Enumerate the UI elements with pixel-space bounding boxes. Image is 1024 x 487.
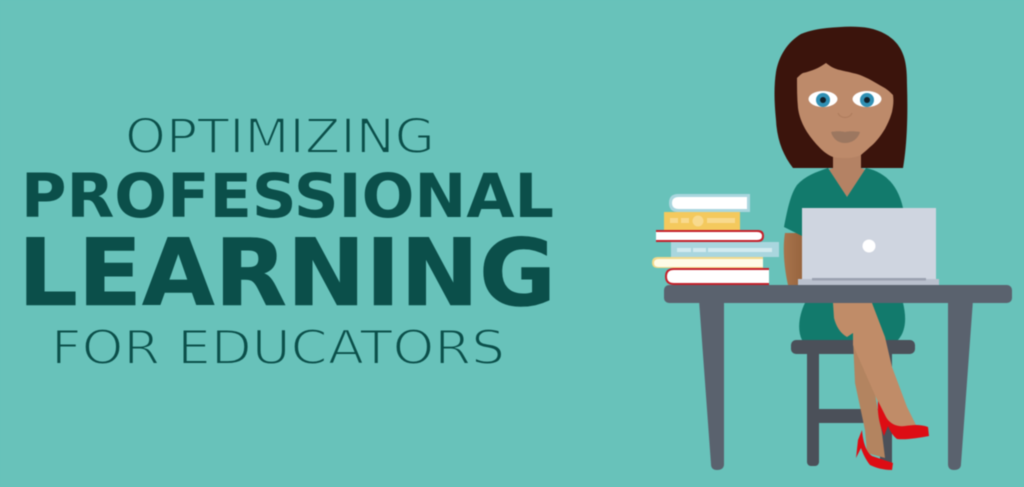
book: white with blue cover	[669, 194, 750, 212]
title line: PROFESSIONAL: PROFESSIONAL	[21, 161, 554, 232]
back leg	[853, 340, 885, 458]
illustration: table	[664, 285, 1012, 470]
nose	[838, 113, 852, 118]
book: red edged	[656, 230, 764, 242]
book: cream	[652, 257, 763, 268]
eyes	[808, 91, 882, 107]
skirt	[799, 303, 905, 340]
title line: LEARNING: LEARNING	[18, 219, 556, 327]
back shoe	[856, 430, 893, 470]
laptop screen	[802, 208, 936, 280]
title line: OPTIMIZING: OPTIMIZING	[125, 109, 435, 165]
arm	[784, 233, 803, 285]
neck	[828, 150, 866, 197]
laptop base	[798, 279, 939, 285]
illustration: woman	[774, 27, 929, 470]
illustration: stool	[791, 340, 915, 466]
book: yellow	[664, 212, 740, 230]
illustration: book stack	[652, 194, 779, 285]
title	[18, 109, 556, 376]
hair	[774, 27, 907, 168]
laptop logo	[862, 240, 876, 252]
front shoe	[878, 401, 929, 439]
illustration: laptop	[798, 208, 939, 285]
book: light blue	[671, 242, 779, 257]
front leg	[833, 303, 917, 428]
title line: FOR EDUCATORS: FOR EDUCATORS	[51, 321, 505, 376]
torso	[784, 168, 904, 285]
book: white with red cover	[665, 268, 769, 285]
mouth	[831, 131, 860, 143]
face	[797, 63, 893, 158]
